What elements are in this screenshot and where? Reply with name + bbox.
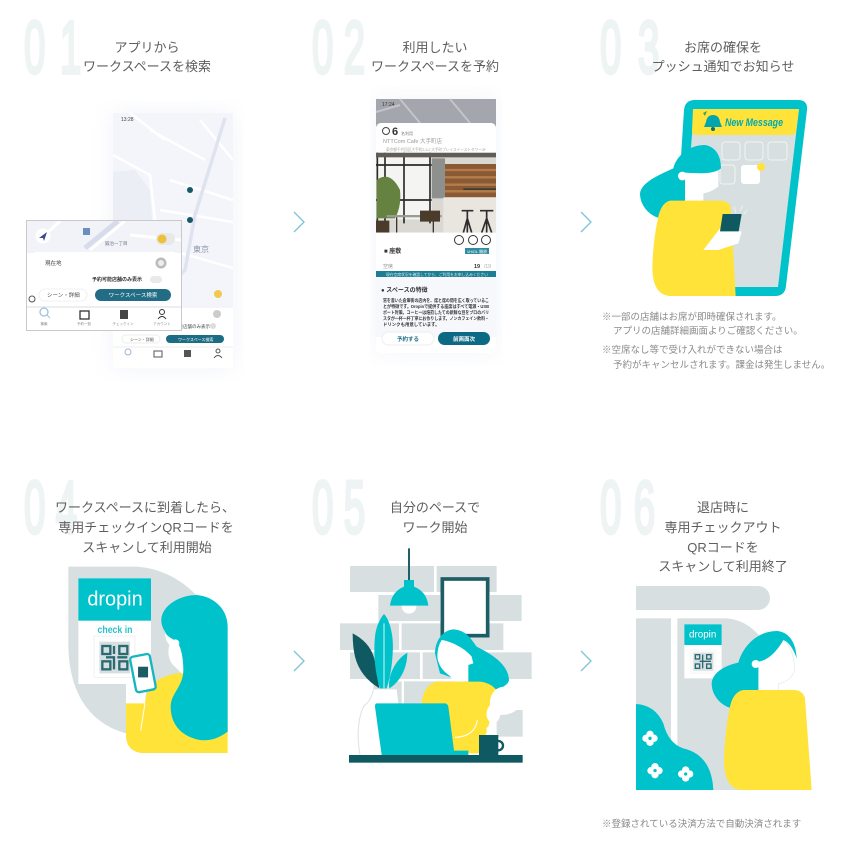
- step 3 notes: [602, 311, 830, 371]
- step 4 illustration: QR check in: [68, 567, 228, 753]
- front zoomed panel: チェックイン: [112, 321, 134, 326]
- cafe photo: [376, 153, 496, 233]
- front zoomed panel: アカウント: [153, 321, 171, 326]
- app icons: [720, 142, 787, 184]
- step 2 illustration: reservation screen: /19: [484, 264, 491, 270]
- step 2 illustration: reservation screen: 前画面次: [453, 335, 475, 343]
- arrow 4 to 5: [294, 651, 304, 671]
- step 2 heading: [371, 40, 499, 74]
- step 2 illustration: reservation screen: 1H/DL 開放: [467, 248, 487, 254]
- step 2 illustration: reservation screen: NTTCom Cafe 大手町店: [383, 137, 442, 145]
- step 2 heading: 利用したい: [402, 40, 468, 55]
- step 5 number: 05: [312, 468, 365, 549]
- step 4 heading: ワークスペースに到着したら、: [55, 500, 235, 515]
- step 2 illustration: reservation screen: 6: [392, 126, 398, 138]
- step 2 illustration: reservation screen: 17:24: [382, 102, 395, 108]
- dropin sign: dropin: [689, 629, 716, 640]
- brick wall: [340, 566, 532, 737]
- step 3 notes: ※空席なし等で受け入れができない場合は: [602, 344, 783, 356]
- step 2 illustration: reservation screen: ポート対策。コーヒーは焙煎したての新鮮な豆をプロのバリ: [383, 309, 489, 316]
- hair: [161, 595, 228, 740]
- front zoomed panel: シーン・詳細: [47, 291, 80, 299]
- step 3 notes: 予約がキャンセルされます。課金は発生しません。: [613, 359, 830, 371]
- step 3 number: 03: [600, 8, 659, 89]
- back phone screen: シーン・詳細: [130, 336, 154, 342]
- hand: [126, 684, 147, 704]
- hair: [712, 631, 797, 708]
- step 5 heading: 自分のペースで: [390, 500, 480, 515]
- icon: bell: [703, 111, 722, 131]
- step 2 illustration: reservation screen: 空席: [383, 264, 393, 270]
- step 5 illustration: working at cafe: [340, 548, 532, 763]
- step 2 illustration: reservation screen: 予約する: [397, 335, 419, 343]
- step 1 heading: ワークスペースを検索: [83, 59, 211, 74]
- step 1 illustration: app search screens: [26, 113, 233, 368]
- step 5 heading: [390, 500, 480, 535]
- picture frame: [442, 579, 488, 636]
- step 2 illustration: reservation screen: [376, 99, 496, 353]
- step 6 heading: 退店時に: [697, 500, 749, 515]
- face: [437, 640, 473, 682]
- step 6 heading: [658, 500, 788, 574]
- step 6 number: 06: [600, 468, 655, 549]
- steam: [486, 687, 519, 731]
- back phone screen: [113, 113, 233, 368]
- hair: [435, 629, 509, 690]
- front zoomed panel: 鍛冶一丁目: [105, 240, 128, 247]
- awning: [636, 586, 770, 610]
- step 2 illustration: reservation screen: 東京都千代田区大手町2-3-2 大手町プレイスイーストタワー3F: [386, 147, 487, 152]
- step 4 illustration: QR check in: check in: [97, 625, 132, 636]
- plant leaves: [353, 614, 407, 688]
- face: [758, 640, 794, 691]
- step 1 heading: [83, 40, 211, 74]
- arrow 5 to 6: [581, 651, 591, 671]
- dropin sign: [78, 620, 151, 684]
- step 2 illustration: reservation screen: ■ 座敷: [384, 247, 401, 255]
- step 2 illustration: reservation screen: 現在空席状況を確認してから、ご利用をお申し込みください: [386, 272, 488, 277]
- front zoomed panel: 検索: [40, 321, 48, 326]
- shirt: [126, 673, 228, 753]
- arrow 2 to 3: [581, 212, 591, 232]
- smartphone: [720, 214, 742, 231]
- bush with flowers: [636, 704, 713, 790]
- phone: [130, 654, 156, 693]
- shirt: [724, 690, 812, 790]
- step 3 illustration: push notification: [640, 100, 807, 296]
- coffee cup: [479, 735, 503, 755]
- arrow 1 to 2: [294, 212, 304, 232]
- laptop: [375, 703, 468, 755]
- step 2 heading: ワークスペースを予約: [371, 59, 499, 74]
- step 4 heading: [55, 500, 235, 555]
- back phone screen: 東京: [193, 244, 209, 254]
- step 6 illustration: check out: [636, 586, 812, 790]
- wall and door: [636, 618, 671, 740]
- step 3 heading: プッシュ通知でお知らせ: [652, 59, 794, 74]
- back phone screen: 13:28: [121, 117, 134, 123]
- step 2 illustration: reservation screen: 窓を書いた倉庫街の店内を、席と席の間を広く取っているこ: [383, 297, 489, 304]
- front zoomed panel: [27, 221, 181, 330]
- face: [165, 632, 184, 674]
- back phone screen: ワークスペース検索: [178, 336, 213, 342]
- front zoomed panel: 現在地: [45, 259, 62, 267]
- step 6 heading: 専用チェックアウト: [664, 520, 782, 535]
- dropin sign: [684, 624, 722, 678]
- tablet: [672, 100, 807, 296]
- notification banner: [692, 109, 799, 135]
- step 2 illustration: reservation screen: 名利用: [401, 130, 413, 136]
- step 5 heading: ワーク開始: [402, 520, 468, 535]
- step 4 number: 04: [24, 468, 77, 549]
- back phone screen: 予約可能店舗のみ表示: [165, 323, 210, 330]
- step 2 illustration: reservation screen: 19: [474, 264, 480, 270]
- step 2 illustration: reservation screen: ドリンクも用意しています。: [383, 321, 440, 328]
- front zoomed panel: 予約一覧: [77, 321, 91, 326]
- step 1 heading: アプリから: [114, 40, 180, 55]
- step 1 number: 01: [24, 8, 81, 89]
- step 4 heading: 専用チェックインQRコードを: [58, 520, 234, 535]
- step 3 notes: アプリの店舗詳細画面よりご確認ください。: [613, 325, 803, 337]
- step 4 illustration: QR check in: dropin: [87, 589, 143, 611]
- step 2 illustration: reservation screen: ● スペースの特徴: [381, 286, 428, 294]
- step 2 number: 02: [312, 8, 365, 89]
- front zoomed panel: ワークスペース検索: [109, 291, 158, 299]
- step 2 illustration: reservation screen: とが特徴です。Dropinで提供する座席はすべて電源・USB: [383, 303, 489, 310]
- person: [640, 145, 747, 296]
- table: [349, 755, 523, 763]
- shirt: [422, 682, 498, 753]
- step 6 heading: スキャンして利用終了: [658, 559, 788, 574]
- vase: [358, 689, 402, 755]
- step 4 heading: スキャンして利用開始: [82, 540, 212, 555]
- step 2 illustration: reservation screen: スタが一杯一杯丁寧にお作りします。ノンカフェイン飲料・: [383, 315, 489, 322]
- step 3 notes: ※一部の店舗はお席が即時確保されます。: [602, 311, 782, 323]
- step 3 heading: お席の確保を: [684, 40, 762, 55]
- step 6 note: ※登録されている決済方法で自動決済されます: [602, 818, 801, 830]
- QR code: [94, 636, 135, 677]
- front zoomed panel: 予約可能店舗のみ表示: [92, 276, 142, 283]
- step 3 heading: [652, 40, 794, 74]
- step 6 heading: QRコードを: [687, 540, 759, 555]
- pendant lamp: [390, 548, 428, 614]
- step 3 illustration: push notification: New Message: [725, 117, 783, 129]
